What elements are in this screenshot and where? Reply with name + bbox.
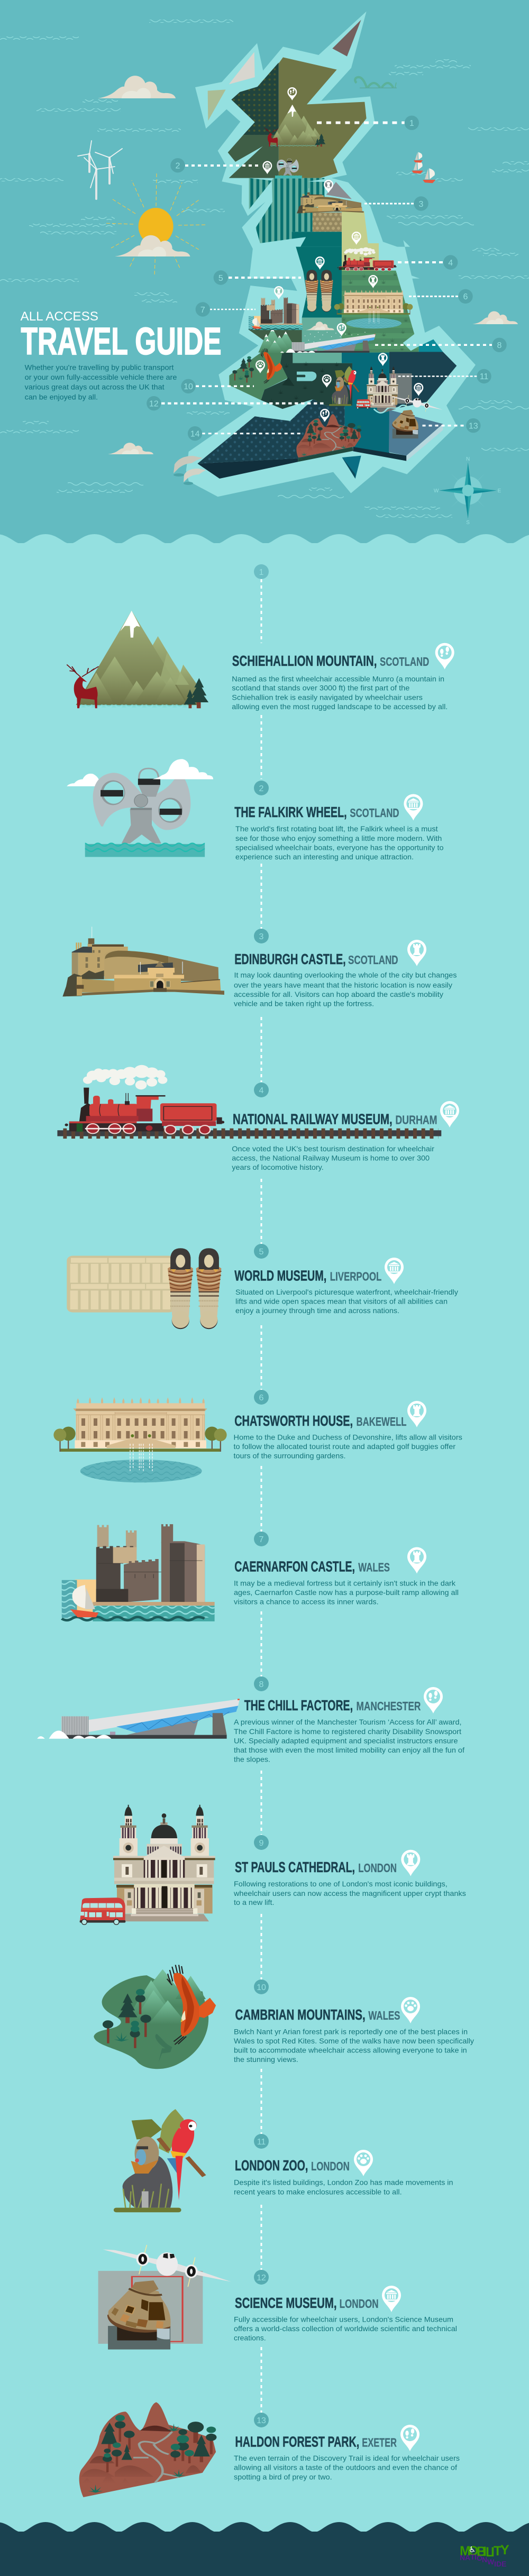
heading 10: WALES [368,2009,400,2022]
header wave edge [0,534,529,544]
body text 2: see for those who enjoy something a little more modern. With [235,834,442,842]
number 3 [254,929,269,943]
pin 11 [354,2150,373,2176]
illustration: st pauls cathedral and bus [80,1805,215,1924]
body text 7: It may be a medieval fortress but it certainly isn't stuck in the dark [234,1579,456,1588]
number 4 [254,1083,269,1097]
illustration: forest trees [103,1989,151,2048]
pin 2 [404,794,423,821]
map illustration: plane [391,395,443,412]
display panel [98,2271,203,2344]
section 10: Cambrian Mountains [94,1965,474,2069]
heading 9: ST PAULS CATHEDRAL, [235,1859,355,1875]
body text 11 [234,2178,453,2196]
illustration: mummies [168,1248,221,1329]
illustration: chatsworth house [53,1397,227,1482]
heading 4: NATIONAL RAILWAY MUSEUM, [233,1111,393,1127]
body text 4: access, the National Railway Museum is home to over 300 [232,1153,430,1162]
body text 6 [234,1433,462,1460]
map number markers: 8 [497,341,502,350]
map number markers: 2 [176,162,180,170]
snow dots [305,332,366,347]
number 12: 12 [257,2274,266,2282]
body text 5: lifts and wide open spaces mean that visitors of all abilities can [235,1297,448,1305]
map leader lines [161,123,492,434]
map illustration: chill factore [280,334,376,353]
illustration: red kite [167,1965,216,2045]
footer band [0,2522,529,2576]
compass rose: W [434,488,439,494]
section 13: Haldon Forest Park [79,2402,460,2497]
map number markers: 6 [463,292,468,301]
number 1: 1 [259,568,264,577]
map illustration: zoo [329,366,359,406]
number 7 [254,1532,269,1546]
body text 12: offers a world-class collection of worldwide scientific and technical [234,2324,457,2333]
body text 8: The Chill Factore is home to registered charity Disability Snowsport [234,1727,461,1736]
illustration: steam train [65,1065,224,1134]
body text 4: Once voted the UK's best tourism destination for wheelchair [232,1144,434,1153]
title block [20,309,221,401]
body text 5 [235,1288,458,1315]
body text 1: Named as the first wheelchair accessible Munro (a mountain in [232,674,444,683]
number 1 [254,564,269,579]
number 5: 5 [259,1248,264,1257]
body text 1 [232,674,448,711]
intro text: Whether you're travelling by public transport [25,363,174,371]
section 12: Science Museum [98,2245,457,2350]
lower pale background [0,543,529,2537]
body text 2: specialised wheelchair boats, everyone has the opportunity to [235,844,444,852]
map illustration: train [338,247,397,271]
body text 11: recent years to make enclosures accessible to all. [234,2187,402,2196]
illustration: mountain and deer [67,611,208,708]
map number markers: 5 [218,274,223,283]
heading 4: DURHAM [395,1113,437,1126]
logo: mobility nationwide: NATIONWIDE [460,2553,506,2568]
body text 13 [234,2454,460,2481]
map illustration: falkirk [275,159,302,179]
heading 11: LONDON [311,2159,350,2173]
number 8: 8 [259,1680,264,1689]
compass rose: E [498,488,501,494]
body text 13: allowing all visitors a taste of the outdoors and even the chance of [234,2463,457,2472]
sun [139,208,174,245]
pin 3 [407,940,426,966]
sea background [0,0,529,545]
number 5 [254,1244,269,1259]
illustration: forest island [94,1969,208,2069]
heading 8: MANCHESTER [357,1699,421,1713]
cloud lower left [108,443,153,454]
number 2 [254,781,269,795]
pin 12 [382,2286,401,2312]
map illustration: chatsworth [334,290,413,328]
number 6: 6 [259,1394,264,1402]
map number markers: 1 [409,119,414,128]
section 7: Caernarfon Castle [62,1524,459,1621]
body text 12 [234,2315,457,2342]
compass rose: N [466,456,470,462]
body text 3: It may look daunting overlooking the whole of the city but changes [234,971,457,979]
body text 6: to follow the allocated tourist route and adapted golf buggies offer [234,1442,455,1451]
illustration: plane [103,2245,231,2287]
heading 7: CAERNARFON CASTLE, [234,1558,355,1574]
heading 12: SCIENCE MUSEUM, [235,2295,336,2311]
map number markers: 13 [469,422,478,430]
heading 8: THE CHILL FACTORE, [244,1697,353,1713]
map illustration: mountain [264,105,325,146]
map illustration: red kite [261,349,282,383]
railway track [57,1129,441,1139]
illustration: caernarfon castle [62,1524,215,1621]
body text 3: vehicle and be taken right up the fortress. [234,1000,374,1008]
intro text: various great days out across the UK that [25,383,165,391]
heading 6: BAKEWELL [357,1415,406,1428]
body text 5: enjoy a journey through time and across nations. [235,1306,399,1315]
heading 2: THE FALKIRK WHEEL, [234,804,347,820]
heading 12: LONDON [340,2297,379,2311]
map number markers: 11 [480,372,488,381]
map: south [186,240,476,497]
heading 6: CHATSWORTH HOUSE, [234,1413,353,1429]
logo: mobility nationwide: MOBILITY [460,2543,509,2560]
number 4: 4 [259,1086,264,1095]
title: all access: ALL ACCESS [20,309,98,324]
compass rose [434,456,501,526]
map illustration: castle [297,188,364,213]
sun rays [105,173,206,276]
number 11 [254,2134,269,2149]
timeline dashed lines [260,579,262,2413]
body text 10: Bwlch Nant yr Arian forest park is reportedly one of the best places in [234,2028,468,2036]
sea squiggles [0,20,529,518]
number 2: 2 [259,784,264,793]
number 8 [254,1676,269,1691]
pin 6 [407,1401,426,1427]
section 2: Falkirk Wheel [67,759,444,861]
body text 6: Home to the Duke and Duchess of Devonshire, lifts allow all visitors [234,1433,462,1441]
body text 1: Schiehallion trek is easily navigated by wheelchair users [232,693,423,701]
map pins [256,87,423,422]
heading 9: LONDON [358,1861,397,1875]
body text 10 [234,2028,474,2064]
body text 7 [234,1579,459,1606]
body text 8: the slopes. [234,1755,270,1764]
body text 5: Situated on Liverpool's picturesque waterfront, wheelchair-friendly [235,1288,458,1296]
pin 7 [407,1547,426,1574]
compass rose: S [466,520,470,526]
number 7: 7 [259,1535,264,1544]
number 3: 3 [259,932,264,941]
map number markers: 4 [448,259,453,268]
section 9: St Pauls Cathedral [80,1805,466,1924]
body text 3 [234,971,457,1008]
body text 13: spotting a bird of prey or two. [234,2473,332,2481]
body text 7: ages, Caernarfon Castle now has a purpose-built ramp allowing all [234,1588,459,1597]
heading 10: CAMBRIAN MOUNTAINS, [235,2006,366,2023]
cloud over wheel [152,759,213,779]
section 5: World Museum [67,1244,458,1329]
map illustration: capsule [392,410,418,438]
body text 1: scotland that stands over 3000 ft) the first part of the [232,684,410,692]
body text 6: tours of the surrounding gardens. [234,1452,346,1460]
pin 9 [401,1850,420,1876]
intro text: or your own fully-accessible vehicle there are [25,373,177,381]
body text 10: the stunning views. [234,2055,298,2064]
intro text: can be enjoyed by all. [25,392,98,401]
body text 4 [232,1144,434,1171]
clouds behind wheel [67,774,111,786]
section 8: The Chill Factore [37,1676,464,1764]
body text 13: The even terrain of the Discovery Trail is ideal for wheelchair users [234,2454,460,2462]
body text 7: visitors a chance to access its inner wards. [234,1598,379,1606]
cloud over sun [115,235,190,256]
map illustration: mummies [305,270,333,312]
pin 1 [435,643,454,670]
map number markers [147,116,507,441]
heading 5: LIVERPOOL [330,1269,381,1283]
body text 2: The world's first rotating boat lift, the Falkirk wheel is a must [235,824,438,833]
body text 3: over the years have meant that the historic location is now easily [234,980,452,989]
snow cloud [306,322,334,330]
wind turbines [78,141,122,199]
map arrow [287,105,296,117]
body text 1: allowing even the most rugged landscape to be accessed by all. [232,702,448,711]
illustration: space capsule [107,2280,171,2350]
heading 5: WORLD MUSEUM, [234,1267,326,1284]
body text 2: experience such an interesting and unique attraction. [235,852,414,861]
map illustration: st pauls [356,366,398,409]
body text 9 [233,1880,466,1906]
body text 10: Wales to spot Red Kites. Some of the walks have now been specifically [234,2037,474,2045]
pin 5 [385,1258,404,1284]
number 13 [254,2413,269,2427]
number 9 [254,1835,269,1850]
illustration: haldon forest [79,2402,216,2497]
body text 9: to a new lift. [234,1898,274,1906]
map number markers: 12 [149,400,159,408]
body text 10: built to accommodate wheelchair access allowing everyone to take in [234,2046,467,2054]
tablet panel [67,1255,175,1313]
map number markers: 3 [419,200,424,209]
section 6: Chatsworth House [53,1390,462,1482]
map number markers: 10 [184,382,193,391]
body text 4: years of locomotive history. [232,1163,324,1171]
number 9: 9 [259,1839,264,1848]
pin 13 [400,2425,419,2451]
heading 7: WALES [358,1560,390,1574]
body text 3: accessible for all. Visitors can hop aboard the castle's mobility [234,990,443,998]
heading 1: SCHIEHALLION MOUNTAIN, [232,653,377,669]
number 11: 11 [257,2138,266,2147]
illustration: falkirk wheel [85,768,205,857]
heading 3: EDINBURGH CASTLE, [234,951,346,967]
logo: mobility nationwide: ♿ [469,2545,476,2554]
heading 11: LONDON ZOO, [235,2157,308,2174]
body text 2 [235,824,444,861]
heading 13: EXETER [362,2436,397,2450]
logo: mobility nationwide [460,2543,509,2568]
section 11: London Zoo [114,2109,453,2212]
body text 8 [234,1718,464,1764]
title: travel guide: TRAVEL GUIDE [21,320,221,363]
pin 10 [401,1997,420,2023]
sailing boats [412,152,435,183]
dolphins [174,456,206,485]
cloud right [472,311,518,324]
body text 11: Despite it's listed buildings, London Zoo has made movements in [234,2178,453,2187]
map illustration: caernarfon [249,298,303,330]
body text 12: creations. [234,2333,266,2342]
illustration: mandrill and parrot [114,2109,204,2212]
number 10 [254,1979,269,1994]
body text 9: wheelchair users can now access the magnificent upper crypt thanks [233,1889,466,1897]
number 10: 10 [257,1983,266,1992]
loch ness monster [355,77,397,88]
section 3: Edinburgh Castle [62,927,457,1008]
map number markers: 7 [200,306,205,315]
section 1: Schiehallion Mountain [67,564,454,711]
body text 9: Following restorations to one of London's most iconic buildings, [234,1880,448,1888]
cloud top left [98,76,176,98]
map illustration: forest trees [232,356,254,382]
map of the UK [147,12,507,497]
body text 8: A previous winner of the Manchester Tourism ‘Access for All’ award, [234,1718,461,1726]
ferns on the map [341,271,409,351]
heading 13: HALDON FOREST PARK, [235,2434,359,2450]
intro text [25,363,177,401]
pin 4 [440,1101,459,1127]
body text 8: that those with even the most limited mobility can enjoy all the fun of [234,1746,464,1754]
map number markers: 14 [190,429,200,439]
snowy welsh mountains [258,328,298,353]
map illustration: haldon [296,414,361,457]
body text 8: UK. Specially adapted equipment and specialist instructors ensure [234,1736,458,1745]
map: north [195,12,419,279]
number 12 [254,2270,269,2285]
pin 8 [424,1687,443,1713]
illustration: edinburgh castle [62,927,224,996]
illustration: chill factore [37,1699,240,1739]
heading 1: SCOTLAND [380,655,429,668]
number 6 [254,1390,269,1405]
section 4: National Railway Museum [57,1065,459,1171]
heading 2: SCOTLAND [350,806,399,820]
heading 3: SCOTLAND [348,953,398,967]
number 13: 13 [257,2416,266,2425]
body text 12: Fully accessible for wheelchair users, London's Science Museum [234,2315,453,2323]
